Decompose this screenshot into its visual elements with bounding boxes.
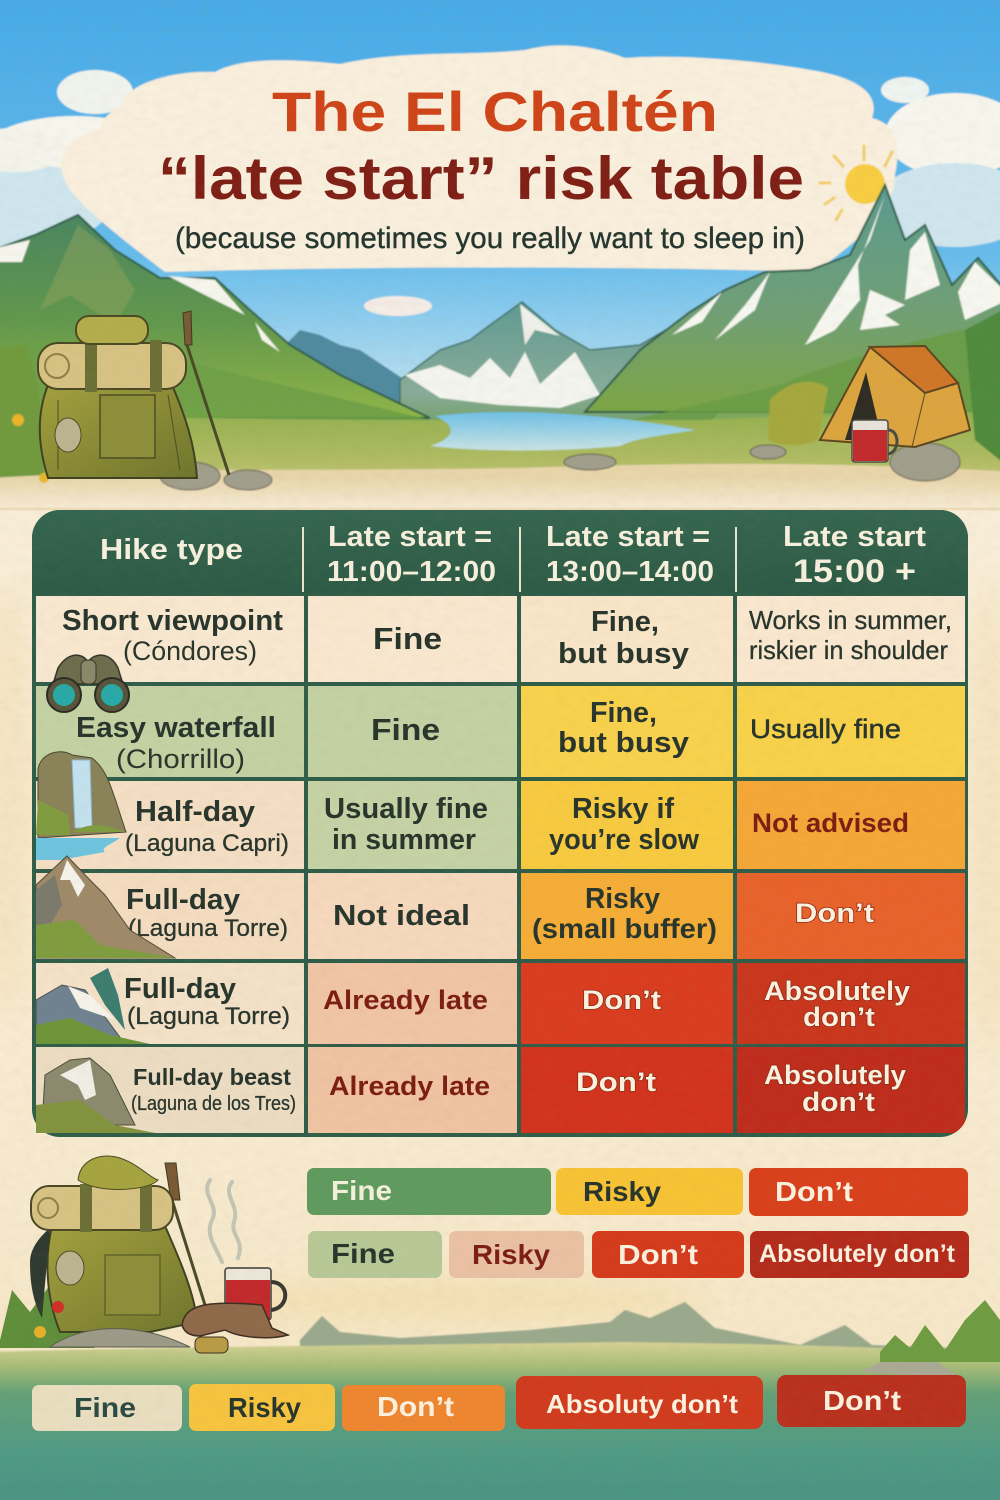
row 2: easy waterfall: [36, 686, 965, 777]
legend chip: risky yellow: [556, 1168, 743, 1215]
icon: tent: [820, 346, 970, 447]
row 2: easy waterfall: but busy: [558, 727, 689, 759]
header: 15:00+: 15:00 +: [793, 553, 916, 589]
small cloud in valley: [364, 296, 432, 316]
row 1: short viewpoint: (Cóndores): [123, 636, 257, 666]
row 1: short viewpoint: Works in summer,: [749, 605, 952, 635]
icon: red mug: [852, 420, 897, 462]
title: [158, 80, 805, 255]
title cloud panel: [61, 45, 898, 272]
row 4: full-day Laguna Torre: (small buffer): [532, 913, 717, 944]
near green slopes: [0, 339, 430, 420]
row 5: full-day Laguna Torre: [36, 963, 965, 1044]
distant hills: [300, 1302, 1000, 1380]
grass field: [0, 1342, 1000, 1500]
row 5: full-day Laguna Torre: Absolutely: [764, 976, 910, 1006]
sky: [0, 0, 1000, 400]
icon: boot and map roll: [182, 1303, 288, 1353]
legend chip: absoluty don't: [516, 1376, 763, 1429]
lake: [430, 412, 695, 450]
icon: backpack (bottom): [0, 1156, 205, 1348]
landscape header illustration: [0, 0, 1000, 510]
row 3: half-day: [36, 781, 965, 869]
distant centre mountains: [400, 302, 760, 430]
distant blue ridge: [270, 330, 420, 425]
legend chip: fine green: [307, 1168, 551, 1215]
header: 11:00-12:00: [327, 521, 496, 588]
legend chip: don't dark red: Don’t: [823, 1385, 901, 1416]
legend chip: absoluty don't: Absoluty don’t: [546, 1389, 738, 1419]
legend chip: don't red: [749, 1168, 968, 1216]
row 1: short viewpoint: [36, 596, 965, 682]
risk table: [32, 510, 968, 1137]
header: 11:00-12:00: Late start =: [328, 521, 492, 553]
legend chip: don't red: Don’t: [775, 1176, 853, 1207]
legend chip: don't red: [592, 1231, 744, 1278]
icon: steam: [207, 1180, 240, 1262]
legend chip: don't orange: [342, 1385, 505, 1431]
icon: binoculars: [47, 655, 129, 712]
row 4: full-day Laguna Torre: [36, 873, 965, 959]
row 1: short viewpoint: but busy: [558, 638, 689, 670]
icon: mountain with trees: [36, 968, 150, 1044]
row 5: full-day Laguna Torre: (Laguna Torre): [127, 1003, 290, 1030]
row 6: full-day beast: Don’t: [576, 1067, 656, 1097]
icon: red mug (bottom): [225, 1268, 285, 1320]
rocks and flowers: [12, 414, 960, 490]
bushes: [0, 345, 45, 480]
legend chip: risky yellow: Risky: [228, 1392, 301, 1423]
header: hike type: Hike type: [100, 534, 243, 566]
right rock and grass: [860, 1300, 1000, 1378]
row 3: half-day: Half-day: [135, 796, 255, 828]
legend chip: fine cream: [32, 1385, 182, 1431]
row 4: full-day Laguna Torre: Not ideal: [333, 900, 470, 932]
table header: [32, 510, 968, 593]
row 5: full-day Laguna Torre: don’t: [803, 1002, 875, 1032]
legend chip: fine cream: Fine: [74, 1392, 136, 1423]
icon: waterfall: [36, 752, 126, 860]
legend row 2: [308, 1231, 969, 1278]
legend chip: absolutely don't: [750, 1231, 969, 1278]
dirt path: [0, 464, 1000, 510]
row 3: half-day: Usually fine: [324, 793, 488, 825]
legend chip: fine pale green: [308, 1231, 442, 1278]
row 2: easy waterfall: Usually fine: [750, 714, 901, 744]
row 3: half-day: in summer: [332, 824, 476, 856]
legend chip: risky yellow: [189, 1384, 335, 1431]
row 1: short viewpoint: Short viewpoint: [62, 605, 283, 637]
legend chip: don't red: Don’t: [618, 1239, 698, 1270]
watercolor blotches: [0, 580, 1000, 1320]
row 2: easy waterfall: Fine: [371, 712, 440, 747]
header: 11:00-12:00: 11:00–12:00: [327, 556, 496, 588]
header: 13:00-14:00: [546, 521, 714, 588]
icon: backpack (top): [38, 311, 229, 478]
bottom landscape: [0, 1300, 1000, 1500]
row 1: short viewpoint: Fine,: [591, 606, 659, 638]
left mountains: [0, 215, 430, 418]
row 6: full-day beast: [36, 1047, 965, 1133]
legend chip: absolutely don't: Absolutely don’t: [759, 1240, 956, 1268]
legend chip: fine pale green: Fine: [331, 1238, 395, 1269]
subtitle: (because sometimes you really want to sleep in): [175, 222, 805, 255]
row 3: half-day: Not advised: [752, 808, 909, 838]
header: 15:00+: [783, 521, 926, 589]
row 2: easy waterfall: (Chorrillo): [116, 744, 245, 774]
row 4: full-day Laguna Torre: Full-day: [126, 884, 240, 916]
row 4: full-day Laguna Torre: (Laguna Torre): [128, 915, 288, 942]
icon: rocky peak: [36, 1058, 155, 1133]
header: 13:00-14:00: Late start =: [546, 521, 710, 553]
row 2: easy waterfall: Easy waterfall: [76, 712, 276, 744]
right mountains: [585, 185, 1000, 412]
row 3: half-day: Risky if: [572, 793, 674, 825]
row 5: full-day Laguna Torre: Full-day: [124, 973, 236, 1005]
row 1: short viewpoint: riskier in shoulder: [749, 635, 948, 665]
row 3: half-day: (Laguna Capri): [125, 830, 289, 857]
row 3: half-day: you’re slow: [549, 824, 699, 856]
title line 2: “late start” risk table: [158, 145, 804, 212]
meadow: [0, 412, 1000, 500]
row 6: full-day beast: (Laguna de los Tres): [131, 1093, 296, 1115]
header: 15:00+: Late start: [783, 521, 926, 553]
legend chip: fine green: Fine: [331, 1175, 392, 1206]
header: 13:00-14:00: 13:00–14:00: [546, 556, 714, 588]
legend chip: risky yellow: Risky: [583, 1176, 661, 1207]
legend row 3: [32, 1375, 966, 1431]
row 5: full-day Laguna Torre: Already late: [323, 985, 488, 1015]
row 6: full-day beast: don’t: [802, 1087, 875, 1117]
row 4: full-day Laguna Torre: Don’t: [795, 898, 874, 928]
clouds behind title: [0, 70, 1000, 247]
row 5: full-day Laguna Torre: Don’t: [582, 985, 661, 1015]
legend chip: don't orange: Don’t: [377, 1391, 454, 1422]
sun: [820, 146, 892, 220]
row 4: full-day Laguna Torre: Risky: [585, 883, 660, 915]
title line 1: The El Chaltén: [272, 80, 718, 143]
row 1: short viewpoint: Fine: [373, 621, 442, 656]
row 6: full-day beast: Full-day beast: [133, 1064, 291, 1090]
legend chip: risky peach: Risky: [472, 1239, 550, 1270]
legend chip: risky peach: [449, 1231, 584, 1278]
icon: mountain Laguna Torre: [36, 856, 175, 958]
legend row 1: [307, 1168, 968, 1216]
row 6: full-day beast: Absolutely: [764, 1060, 906, 1090]
legend chip: don't dark red: [777, 1375, 966, 1427]
row 6: full-day beast: Already late: [329, 1071, 490, 1101]
fade to paper: [0, 478, 1000, 508]
row 2: easy waterfall: Fine,: [590, 697, 657, 729]
